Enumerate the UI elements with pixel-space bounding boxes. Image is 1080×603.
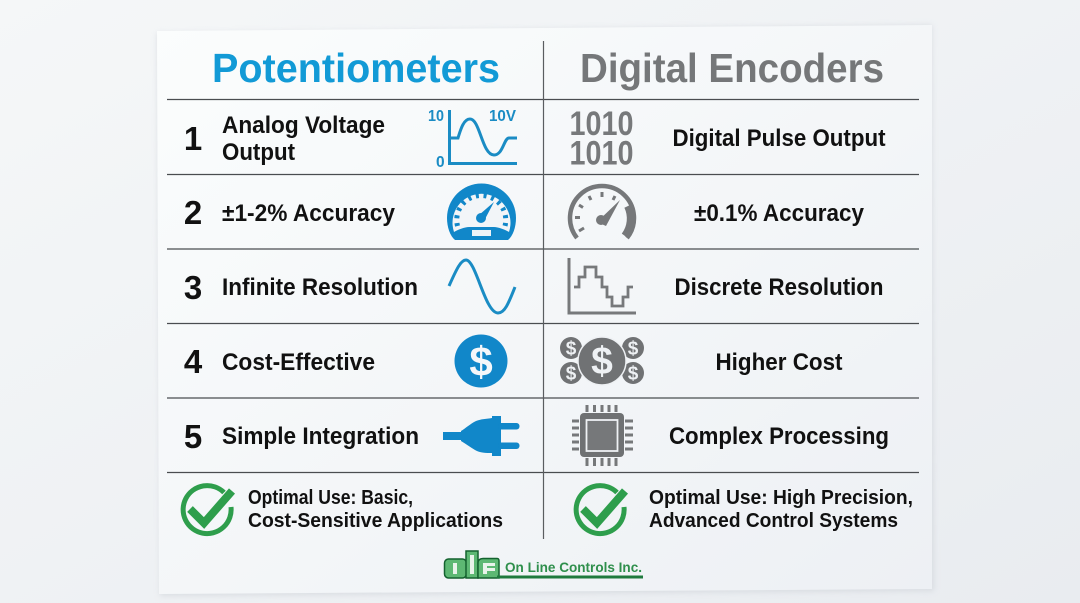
- row numbers: 3: [184, 269, 202, 306]
- icon: analog voltage graph: 0: [436, 154, 445, 171]
- logo: On Line Controls Inc.: On Line Controls Inc.: [505, 559, 642, 575]
- text: optimal use right: Advanced Control Systems: [649, 510, 898, 532]
- text: optimal use right: [649, 487, 913, 532]
- icon: grey gauge: [570, 186, 634, 238]
- row labels left: Cost-Effective: [222, 349, 375, 376]
- row labels right: Digital Pulse Output: [672, 125, 886, 152]
- icon: analog voltage graph: [428, 108, 517, 171]
- icon: analog voltage graph: 10V: [489, 108, 517, 125]
- icon: blue plug: [443, 416, 520, 456]
- icon: blue gauge: [447, 184, 516, 240]
- icon: grey dollar coins: $: [566, 364, 577, 384]
- icon: blue dollar coin: $: [469, 338, 493, 385]
- row 1 left label: Output: [222, 139, 295, 166]
- heading: Potentiometers: Potentiometers: [212, 45, 500, 91]
- icon: binary digits: 1010: [570, 134, 634, 172]
- icon: binary digits: 1010: [570, 105, 634, 143]
- icon: stepped waveform: [569, 258, 636, 313]
- text: optimal use left: Cost-Sensitive Applications: [248, 510, 503, 532]
- icon: grey dollar coins: $: [628, 364, 639, 384]
- row labels right: Higher Cost: [716, 349, 842, 376]
- row numbers: 5: [184, 418, 202, 455]
- icon: grey dollar coins: $: [628, 338, 639, 360]
- panel: paper sheet: [157, 25, 932, 594]
- icon: grey dollar coins: $: [591, 340, 613, 383]
- row numbers: 4: [184, 343, 203, 380]
- row 1 left label: [222, 112, 385, 166]
- row numbers: [184, 120, 203, 455]
- icon: grey dollar coins: [560, 337, 644, 385]
- icon: right green check: [576, 486, 625, 534]
- icon: sine wave: [449, 260, 515, 313]
- row 1 left label: Analog Voltage: [222, 112, 385, 139]
- text: optimal use left: Optimal Use: Basic,: [248, 487, 413, 509]
- icon: grey dollar coins: $: [566, 338, 577, 360]
- row labels left: [222, 200, 419, 450]
- row numbers: 1: [184, 120, 202, 157]
- row labels right: Discrete Resolution: [674, 274, 884, 301]
- text: optimal use right: Optimal Use: High Precision,: [649, 487, 913, 509]
- row labels right: [669, 125, 889, 450]
- row labels right: ±0.1% Accuracy: [694, 200, 864, 227]
- icon: processor chip: [572, 405, 633, 466]
- row labels right: Complex Processing: [669, 423, 889, 450]
- row labels left: Simple Integration: [222, 423, 419, 450]
- row labels left: Infinite Resolution: [222, 274, 418, 301]
- text: optimal use left: [248, 487, 503, 532]
- icon: analog voltage graph: 10: [428, 108, 444, 125]
- logo: On Line Controls Inc.: [444, 551, 643, 578]
- row numbers: 2: [184, 194, 202, 231]
- icon: left green check: [183, 486, 232, 534]
- icon: binary digits: [570, 105, 634, 172]
- heading: Digital Encoders: Digital Encoders: [580, 45, 884, 91]
- row labels left: ±1-2% Accuracy: [222, 200, 395, 227]
- icon: blue dollar coin: [454, 334, 508, 388]
